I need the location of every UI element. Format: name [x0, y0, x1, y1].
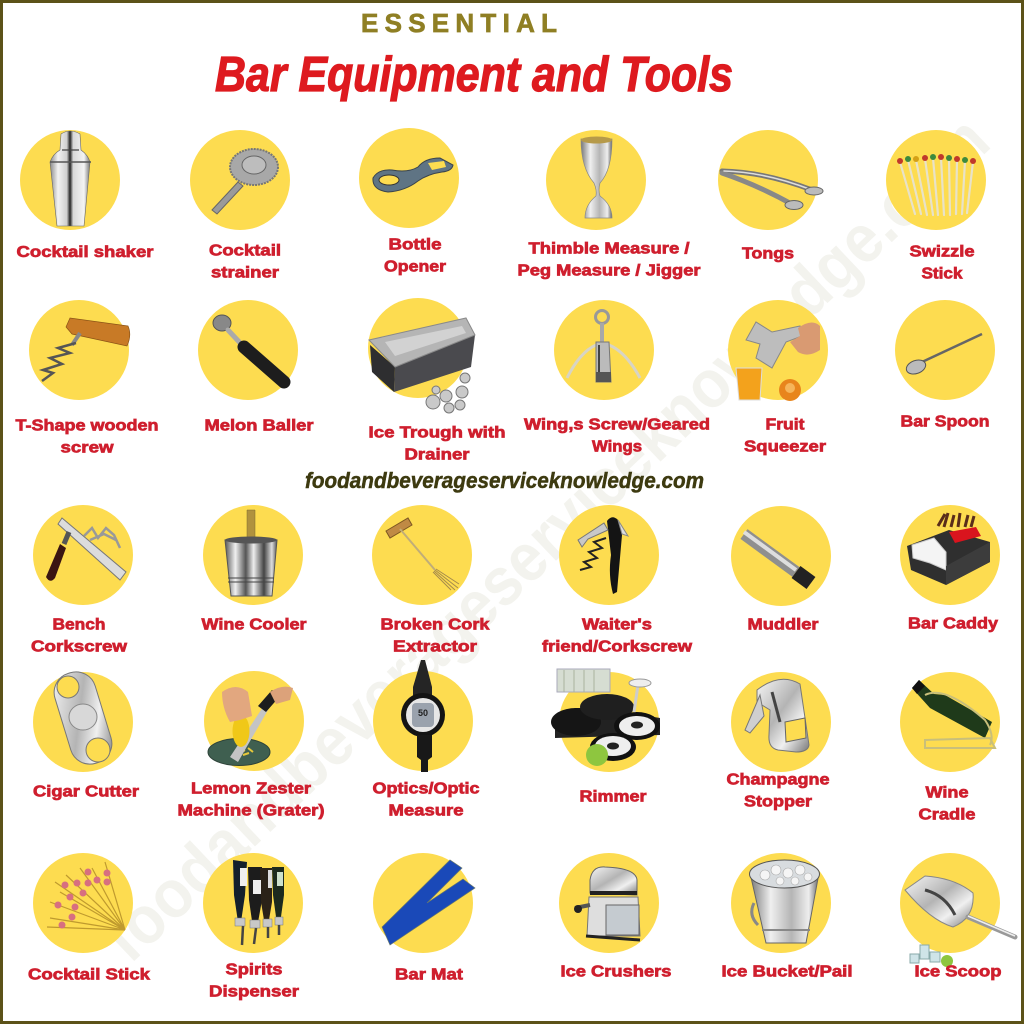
icon: wing corkscrew: [567, 310, 640, 382]
label: [178, 780, 324, 820]
label: [209, 242, 281, 282]
label: Bench: [52, 616, 106, 634]
item: bottle opener: [359, 128, 459, 276]
item: ice crushers: [559, 853, 672, 980]
icon: lemon zester: [208, 687, 293, 766]
item: rimmer: [551, 669, 660, 806]
icon: bottle opener: [373, 158, 453, 192]
item: cocktail stick: [28, 853, 150, 984]
item: bar caddy: [900, 505, 1000, 632]
item: wing screw: [524, 300, 710, 456]
label: Bar Spoon: [900, 414, 990, 430]
label: Ice Scoop: [914, 964, 1002, 980]
label: [542, 616, 693, 656]
item: bar mat: [373, 853, 475, 984]
label: Stopper: [744, 794, 812, 810]
item: thimble measure: [518, 130, 700, 280]
label: [918, 784, 976, 824]
icon: optic: [401, 660, 445, 772]
label: [384, 236, 446, 276]
label: Opener: [384, 258, 446, 276]
label: [372, 780, 480, 820]
label: Peg Measure / Jigger: [518, 262, 700, 280]
label: Cocktail: [209, 242, 281, 260]
label: Broken Cork: [380, 616, 490, 634]
icon: ice bucket: [750, 860, 820, 943]
item: cocktail shaker: [16, 130, 154, 261]
label: [31, 616, 128, 656]
item: wine cooler: [202, 505, 306, 634]
icon: cork extractor: [386, 518, 459, 590]
label: Cigar Cutter: [33, 784, 139, 800]
label: Wine Cooler: [202, 616, 306, 634]
item: swizzle stick: [886, 130, 986, 282]
label: [524, 416, 710, 456]
label: Machine (Grater): [178, 802, 324, 820]
label: Bar Caddy: [908, 616, 998, 632]
icon: strainer: [212, 149, 278, 214]
label: Lemon Zester: [191, 780, 311, 798]
icon: spirits dispenser: [233, 860, 284, 945]
icon: cigar cutter: [49, 667, 117, 769]
icon: bar mat: [382, 860, 475, 945]
label: Extractor: [393, 638, 477, 656]
icon: cocktail sticks: [47, 862, 125, 930]
label: Muddler: [748, 616, 818, 634]
icon: optic: 50: [418, 708, 428, 718]
label: Wing,s Screw/Geared: [524, 416, 710, 434]
icon: bench corkscrew: [46, 518, 126, 581]
item: t-shape wooden screw: [16, 300, 158, 456]
icon: wine cradle: [912, 680, 995, 748]
label: [910, 244, 975, 282]
icon: waiter's friend: [578, 517, 628, 594]
label: Stick: [922, 266, 963, 282]
label: Bar Mat: [395, 966, 463, 984]
item: optic measure: [372, 660, 480, 820]
label: Melon Baller: [204, 418, 314, 434]
item: bench corkscrew: [31, 505, 133, 656]
label: Thimble Measure /: [528, 240, 690, 258]
label: [209, 962, 299, 1000]
label: screw: [60, 440, 115, 456]
label: Swizzle: [910, 244, 975, 260]
label: Fruit: [766, 416, 804, 434]
label: Cradle: [918, 806, 976, 824]
icon: melon baller: [213, 315, 284, 382]
heading: essential: ESSENTIAL: [361, 8, 557, 38]
label: Optics/Optic: [372, 780, 480, 798]
icon: tongs: [722, 171, 823, 210]
label: Tongs: [742, 246, 794, 262]
item: ice scoop: [900, 853, 1015, 980]
item: muddler: [731, 506, 831, 634]
label: Ice Crushers: [560, 964, 672, 980]
icon: swizzle sticks: [897, 154, 976, 215]
item: waiter's friend: [542, 505, 693, 656]
label: Bottle: [388, 236, 442, 254]
label: [16, 418, 158, 456]
label: Drainer: [404, 446, 470, 464]
label: Ice Bucket/Pail: [722, 964, 852, 980]
label: [744, 416, 826, 456]
item: bar spoon: [895, 300, 995, 430]
icon: jigger: [581, 136, 612, 218]
icon: champagne stopper: [745, 679, 809, 752]
icon: muddler: [744, 532, 811, 583]
label: [726, 772, 830, 810]
icon: wine cooler: [225, 510, 277, 596]
item: broken cork extractor: [372, 505, 490, 656]
icon: squeezer: [736, 322, 820, 401]
label: [518, 240, 700, 280]
label: Squeezer: [744, 438, 826, 456]
item: cocktail strainer: [190, 130, 290, 282]
label: Measure: [388, 802, 464, 820]
label: strainer: [211, 264, 279, 282]
label: Rimmer: [580, 788, 646, 806]
label: Dispenser: [209, 984, 299, 1000]
title: Bar Equipment and Tools: [215, 48, 733, 102]
icon: bar caddy: [907, 513, 990, 585]
item: cigar cutter: [33, 667, 139, 800]
icon: ice crusher: [574, 867, 640, 940]
item: melon baller: [198, 300, 314, 434]
item: spirits dispenser: [203, 853, 303, 1000]
label: Wings: [592, 438, 642, 456]
label: Spirits: [226, 962, 282, 978]
label: friend/Corkscrew: [542, 638, 693, 656]
item: ice bucket: [722, 853, 852, 980]
label: Wine: [926, 784, 969, 802]
item: champagne stopper: [726, 672, 831, 810]
item: ice trough with drainer: [368, 298, 506, 464]
label: Waiter's: [582, 616, 652, 634]
label: Ice Trough with: [368, 424, 506, 442]
icon: ice trough: [369, 318, 475, 413]
icon: wooden corkscrew: [42, 318, 130, 381]
label: [368, 424, 506, 464]
label: Cocktail Stick: [28, 966, 150, 984]
item: wine cradle: [900, 672, 1000, 824]
icon: ice scoop: [905, 876, 1015, 967]
icon: rimmer: [551, 669, 660, 766]
label: Champagne: [726, 772, 830, 788]
icon: bar spoon: [904, 334, 982, 377]
label: [380, 616, 490, 656]
label: Corkscrew: [31, 638, 128, 656]
icon: shaker: [50, 131, 91, 226]
website url: foodandbeverageserviceknowledge.com: [305, 468, 704, 493]
label: Cocktail shaker: [16, 244, 154, 261]
label: T-Shape wooden: [16, 418, 158, 434]
item: fruit squeezer: [728, 300, 828, 456]
item: tongs: [718, 130, 823, 262]
item: lemon zester: [178, 671, 324, 820]
